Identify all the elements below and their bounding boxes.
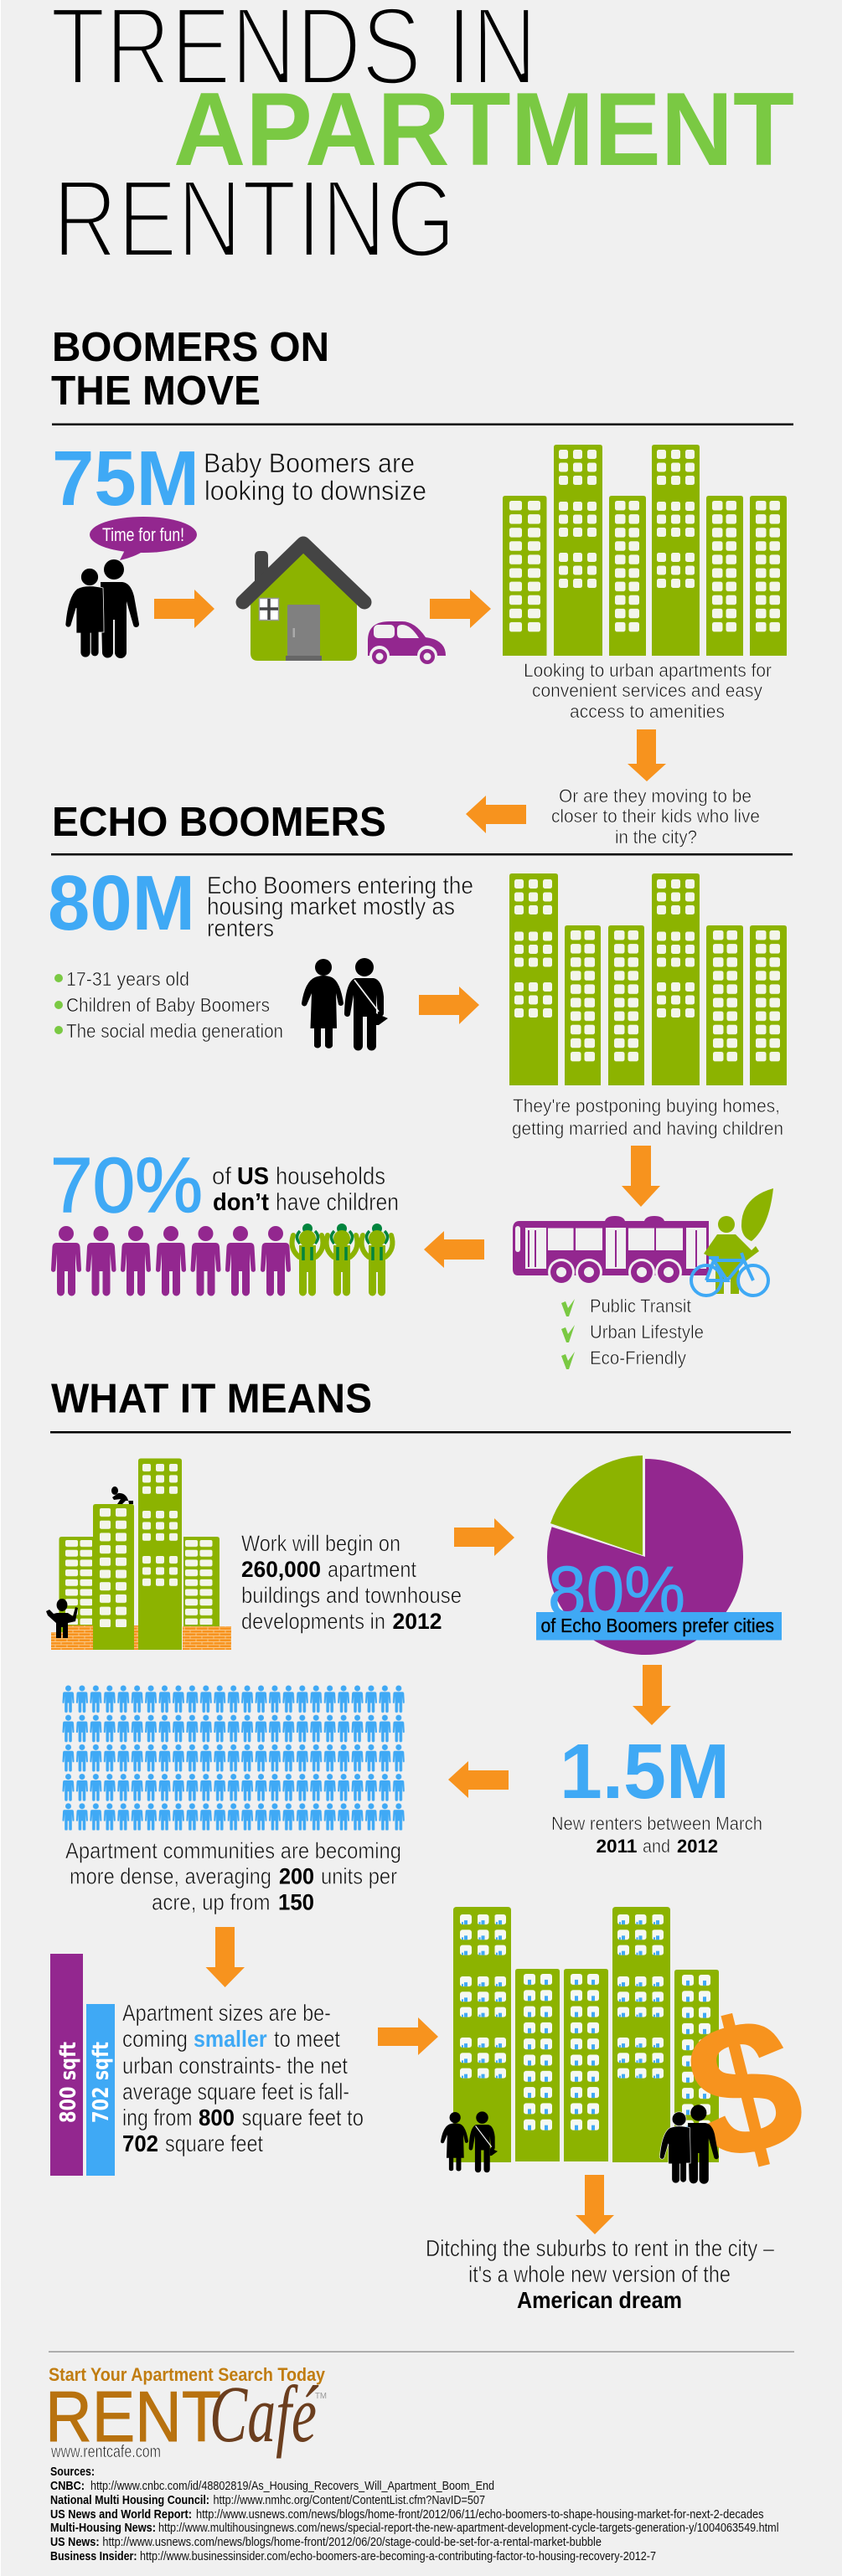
footer: sources: http://www.nmhc.org/Content/ContentList.cfm?NavID=507 [213,2494,485,2507]
arrow [454,1518,514,1556]
footer: sources: US News and World Report: [50,2508,192,2522]
icon: young couple small [441,2111,498,2172]
arrow [448,1761,509,1798]
icon: apartment skyline 2 [509,873,787,1085]
stat: 75M baby boomers: 75M [52,435,199,522]
stat: 80M echo boomers: 80M [48,859,195,946]
stat: 1.5M: 1.5M [560,1728,730,1815]
text: apartment sizes: square feet [165,2130,263,2156]
footer: sources: National Multi Housing Council: [50,2494,209,2507]
text: work will begin: buildings and townhouse [241,1583,462,1608]
text: work will begin: apartment [328,1557,416,1582]
text: urban apartments: access to amenities [570,701,725,722]
footer: sources: http://www.usnews.com/news/blogs/home-front/2012/06/11/echo-boomers-to-shape-housing-market-for-next-2-decades [196,2508,764,2522]
stat: 70%: households [276,1163,385,1190]
text: urban apartments: convenient services and easy [532,680,762,701]
heading: boomers on the move: THE MOVE [51,368,261,414]
icon: young couple [302,958,388,1050]
logo: RentCafe: RENT [45,2378,221,2457]
icon: standing worker [46,1599,78,1638]
pie chart: 80%: of Echo Boomers prefer cities [541,1615,774,1636]
text: urban apartments [524,660,772,722]
title: APARTMENT [173,72,794,188]
pie chart: 80%: 80% [548,1552,685,1631]
icon: cyclist with leaf [691,1188,773,1296]
text: american dream [426,2235,774,2313]
logo: RentCafe: TM [315,2392,327,2401]
text: apartment sizes: 702 [122,2130,158,2156]
footer: sources: Multi-Housing News: [50,2522,156,2535]
footer: sources: Sources: [50,2465,95,2479]
arrow [154,590,214,628]
footer: sources: http://www.businessinsider.com/echo-boomers-are-becoming-a-contributing-factor-to-housing-recovery-2012-7 [140,2550,656,2563]
title: RENTING [53,157,456,280]
bullet list: 17-31 years old [66,968,189,990]
icon: older couple small [659,2105,719,2184]
text: density: units per [321,1864,397,1889]
stat: 75M baby boomers: looking to downsize [204,476,426,506]
text: apartment sizes: coming [122,2026,188,2052]
text: density: Apartment communities are becoming [65,1838,401,1863]
stat: 70% [50,1141,399,1229]
text: urban apartments: Looking to urban apartments for [524,660,772,681]
checklist: Urban Lifestyle [590,1321,704,1342]
logo: RentCafe [45,2369,327,2459]
text: closer to kids [551,786,760,848]
text: postponing [512,1095,783,1139]
icon: dollar sign: $ [668,1973,821,2202]
icon: construction skyline [51,1459,231,1650]
footer: sources: http://www.cnbc.com/id/48802819/As_Housing_Recovers_Will_Apartment_Boom_End [90,2480,494,2493]
stat: 75M baby boomers [52,435,426,522]
footer: sources: http://www.usnews.com/news/blogs/home-front/2012/06/20/stage-could-be-set-for-a-rental-market-bubble [102,2536,602,2549]
pie chart: 80% [536,1455,782,1655]
arrow [430,590,491,628]
text: work will begin: Work will begin on [241,1531,400,1556]
text: density [65,1838,401,1914]
text: closer to kids: closer to their kids who live [551,806,760,827]
arrow [622,1146,660,1207]
stat: 80M echo boomers [48,859,473,946]
text: apartment sizes: smaller [194,2026,267,2052]
bullet list: Children of Baby Boomers [66,994,270,1016]
stat: 1.5M: 2011 [597,1836,637,1857]
footer: call to action: Start Your Apartment Search Today [49,2364,326,2385]
arrow [424,1231,484,1268]
heading: what it means: WHAT IT MEANS [51,1377,372,1422]
heading: boomers on the move [51,325,793,425]
arrow [206,1927,245,1987]
text: density: 150 [278,1889,314,1914]
bar: 702 sqft [86,2004,115,2176]
heading: echo boomers: ECHO BOOMERS [52,800,386,845]
text: work will begin: 2012 [392,1609,442,1634]
footer: sources: Business Insider: [50,2550,137,2563]
text: apartment sizes: average square feet is fall- [122,2079,349,2105]
text: american dream: Ditching the suburbs to rent in the city – [426,2235,774,2261]
logo: RentCafe: Café [209,2369,319,2459]
checklist: Eco-Friendly [590,1347,686,1368]
footer: sources: CNBC: [50,2480,85,2493]
stat: 1.5M: and [643,1836,670,1857]
people row: households [51,1224,392,1296]
stat: 70%: have children [276,1189,399,1216]
text: apartment sizes: urban constraints- the net [122,2053,348,2079]
text: closer to kids: Or are they moving to be [559,786,752,806]
bullet list: The social media generation [66,1020,283,1042]
arrow [378,2017,438,2055]
text: apartment sizes: square feet to [241,2105,364,2130]
text: work will begin: 260,000 [241,1557,321,1582]
text: density: acre, up from [152,1889,270,1914]
bullet list [54,968,283,1042]
text: apartment sizes: Apartment sizes are be- [122,2000,331,2026]
stat: 80M echo boomers: renters [207,915,274,942]
arrow [628,729,666,781]
speech bubble: Time for fun! [102,524,184,545]
text: american dream: it's a whole new version of the [468,2261,731,2287]
stat: 1.5M [551,1728,762,1857]
arrow [466,796,526,833]
text: work will begin [241,1531,462,1634]
icon: car [368,621,446,664]
stat: 70%: US [237,1163,269,1190]
stat: 70%: of [212,1163,232,1190]
text: american dream: American dream [517,2287,682,2313]
icon: apartment skyline with residents [453,1907,719,2162]
stat: 1.5M: 2012 [677,1836,718,1857]
text: density: 200 [279,1864,314,1889]
heading: boomers on the move: BOOMERS ON [52,325,329,370]
footer: website: www.rentcafe.com [50,2443,161,2461]
icon: house [243,544,364,661]
arrow [419,987,479,1024]
crowd of people [62,1685,406,1831]
text: postponing: getting married and having children [512,1118,783,1139]
text: apartment sizes: 800 [199,2105,235,2130]
text: apartment sizes: to meet [274,2026,340,2052]
stat: 80M echo boomers: Echo Boomers entering the [207,873,473,899]
footer: sources [50,2465,779,2563]
stat: 1.5M: New renters between March [551,1813,762,1834]
icon: bus [513,1216,709,1285]
icon: crouching worker [111,1486,133,1504]
footer: sources: US News: [50,2536,100,2549]
arrow [576,2175,614,2234]
text: apartment sizes [122,2000,364,2156]
icon: older couple [65,559,139,658]
icon: apartment skyline 1 [503,445,787,656]
checklist [561,1296,704,1369]
text: postponing: They're postponing buying homes, [513,1095,780,1116]
text: closer to kids: in the city? [615,827,697,848]
speech bubble [90,517,197,560]
checklist: Public Transit [590,1296,691,1316]
title [50,0,794,280]
bar: 702 sqft: 702 sqft [89,2042,114,2123]
text: apartment sizes: ing from [122,2105,193,2130]
arrow [633,1665,671,1725]
stat: 70%: 70% [50,1141,203,1229]
bar: 800 sqft [50,1954,83,2176]
stat: 75M baby boomers: Baby Boomers are [204,448,415,478]
text: density: more dense, averaging [70,1864,271,1889]
bar: 800 sqft: 800 sqft [56,2042,81,2123]
stat: 80M echo boomers: housing market mostly as [207,894,455,920]
text: work will begin: developments in [241,1609,385,1634]
stat: 70%: don’t [213,1189,269,1216]
